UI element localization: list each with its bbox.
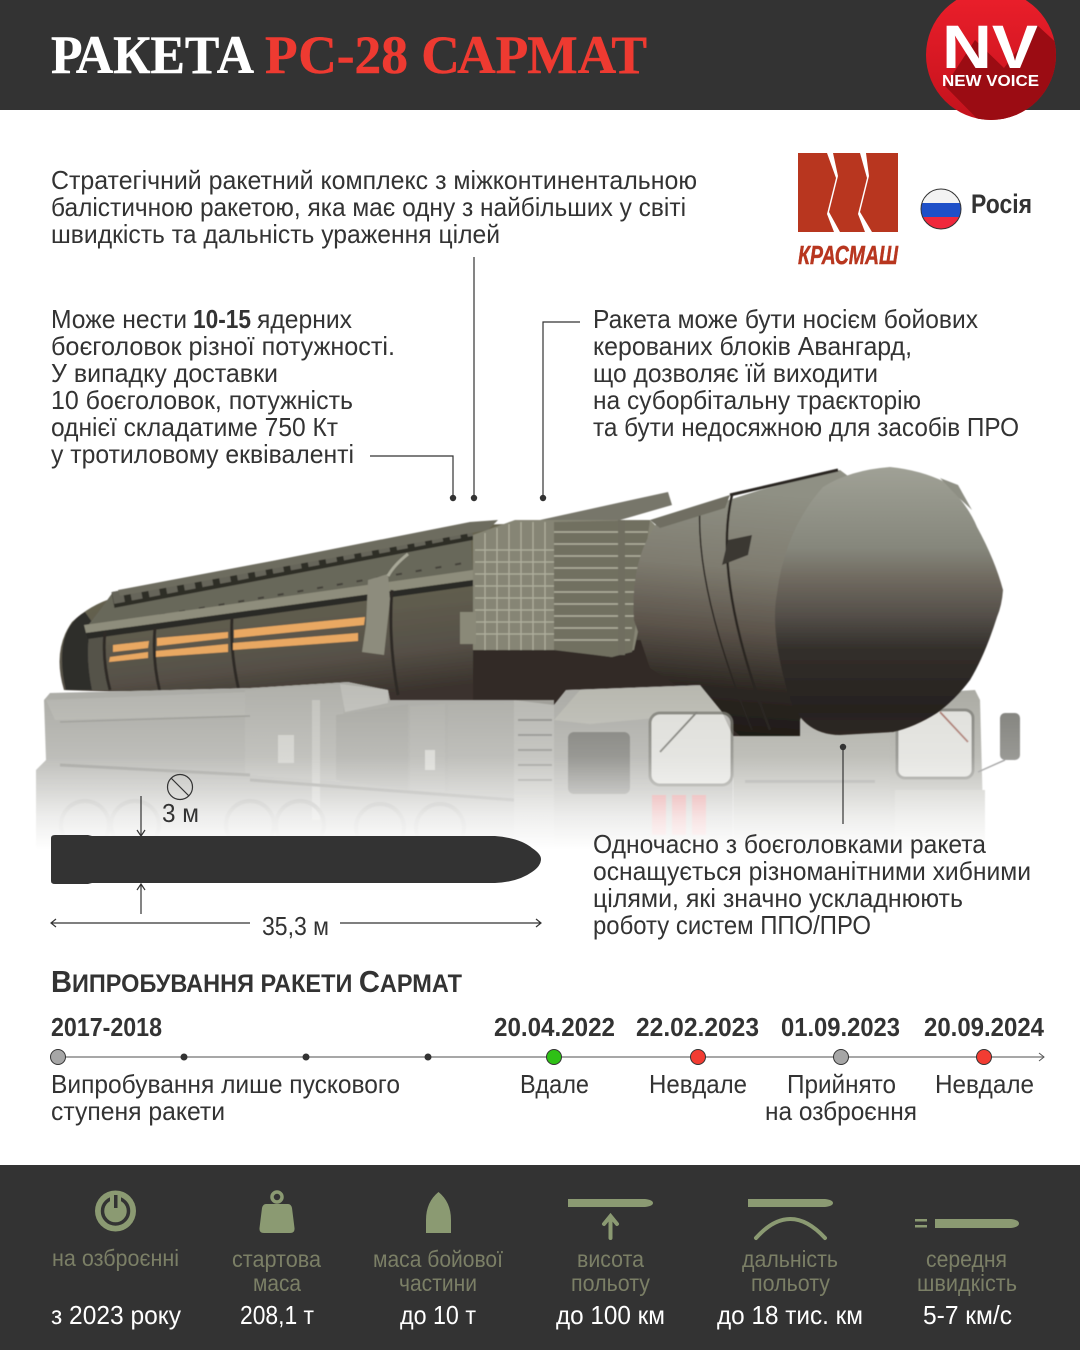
spec: average speed: швидкість <box>917 1270 1017 1296</box>
spec: average speed: 5-7 км/с <box>923 1300 1012 1330</box>
timeline dates: 20.04.2022 <box>494 1012 615 1042</box>
text block: warheads <box>51 304 395 469</box>
timeline descriptions: Невдале <box>935 1069 1034 1099</box>
rear body of the missile <box>60 520 740 736</box>
icon: rocket and arc <box>748 1199 833 1238</box>
text block: decoys: роботу систем ППО/ПРО <box>593 910 871 940</box>
spec: warhead mass: до 10 т <box>400 1300 476 1330</box>
icon: warhead <box>426 1192 451 1233</box>
tube <box>84 570 473 633</box>
timeline dates: 20.09.2024 <box>924 1012 1044 1042</box>
timeline dates: 2017-2018 <box>51 1012 162 1042</box>
spec: flight range <box>717 1199 863 1330</box>
missile <box>60 467 1003 736</box>
text block: Avangard: що дозволяє їй виходити <box>593 358 878 388</box>
spec: warhead mass <box>373 1192 504 1330</box>
spec: warhead mass: частини <box>399 1270 477 1296</box>
title: РАКЕТА <box>51 25 254 85</box>
spec: flight range: до 18 тис. км <box>717 1300 863 1330</box>
timeline dates <box>51 1012 1044 1042</box>
logo: Krasmash: КРАСМАШ <box>798 240 898 270</box>
truck front layer (launcher bed and cab) <box>36 682 733 852</box>
spec: in service: з 2023 року <box>51 1300 181 1330</box>
truck rear layer (behind the missile nose) <box>733 690 1020 850</box>
spec: launch mass: 208,1 т <box>240 1300 314 1330</box>
timeline descriptions: Невдале <box>649 1069 747 1099</box>
nose cone <box>775 467 1003 735</box>
timeline descriptions: ступеня ракети <box>51 1096 225 1126</box>
spec: launch mass <box>232 1192 321 1330</box>
text block: decoys: Одночасно з боєголовками ракета <box>593 829 986 859</box>
timeline descriptions <box>51 1069 1034 1126</box>
country: Russia flag and name: Росія <box>971 189 1032 219</box>
mid cylinder <box>633 470 880 736</box>
length arrow <box>51 919 541 927</box>
missile dimensions diagram <box>51 774 541 941</box>
rocket silhouette <box>51 835 541 884</box>
logo: NV New Voice <box>926 0 1056 120</box>
spec: average speed <box>915 1219 1019 1330</box>
logo: NV New Voice: NV <box>942 13 1038 81</box>
intro text: швидкість та дальність ураження цілей <box>51 219 500 249</box>
orange stripes <box>109 617 365 662</box>
timeline dates: 22.02.2023 <box>636 1012 759 1042</box>
text block: Avangard: Ракета може бути носієм бойових <box>593 304 978 334</box>
timeline descriptions: Випробування лише пускового <box>51 1069 400 1099</box>
text block: decoys: цілями, які значно ускладнюють <box>593 883 963 913</box>
text block: warheads: 10 боєголовок, потужність <box>51 385 353 415</box>
leader lines with dots <box>370 257 846 824</box>
icon: rocket and up arrow <box>568 1199 653 1238</box>
spec: in service <box>51 1190 181 1330</box>
text block: Avangard: на суборбітальну траєкторію <box>593 385 921 415</box>
icon: fast rocket <box>915 1219 1019 1228</box>
text block: warheads: Може нести <box>51 304 187 334</box>
text block: warheads: 10-15 <box>193 304 251 334</box>
timeline dates: 01.09.2023 <box>781 1012 900 1042</box>
logo: NV New Voice: NEW VOICE <box>942 73 1039 90</box>
spec: flight altitude: висота <box>577 1246 644 1272</box>
spec: warhead mass: маса бойової <box>373 1246 504 1272</box>
text block: decoys: оснащується різноманітними хибними <box>593 856 1031 886</box>
intro text <box>51 165 697 249</box>
text block: Avangard <box>593 304 1019 442</box>
spec: launch mass: стартова <box>232 1246 321 1272</box>
spec: launch mass: маса <box>253 1270 301 1296</box>
title: РС-28 САРМАТ <box>265 25 647 85</box>
spec: in service: на озброєнні <box>52 1245 179 1271</box>
diameter arrows <box>137 796 145 914</box>
timeline markers <box>50 1050 992 1064</box>
spec: flight range: дальність <box>742 1246 838 1272</box>
intro text: Стратегічний ракетний комплекс з міжконтинентальною <box>51 165 697 195</box>
header band <box>0 0 1080 110</box>
logo: Krasmash <box>798 153 898 270</box>
timeline descriptions: на озброєння <box>765 1096 917 1126</box>
spec: average speed: середня <box>926 1246 1007 1272</box>
lattice box <box>473 520 660 657</box>
timeline axis <box>58 1056 1044 1058</box>
diameter icon <box>168 774 192 800</box>
footer panel: key specs <box>0 1165 1080 1350</box>
text block: Avangard: та бути недосяжною для засобів ПРО <box>593 412 1019 442</box>
title <box>51 25 647 85</box>
spec: flight altitude: до 100 км <box>556 1300 665 1330</box>
timeline <box>50 1012 1044 1126</box>
text block: warheads: однієї складатиме 750 Кт <box>51 412 338 442</box>
timeline descriptions: Вдале <box>520 1069 589 1099</box>
text block: warheads: У випадку доставки <box>51 358 278 388</box>
text block: warheads: у тротиловому еквіваленті <box>51 439 354 469</box>
diameter label: 3 м <box>162 798 199 828</box>
spec: flight range: польоту <box>751 1270 830 1296</box>
fin and ribs <box>362 574 390 655</box>
spec: flight altitude: польоту <box>571 1270 650 1296</box>
intro text: балістичною ракетою, яка має одну з найбільших у світі <box>51 192 686 222</box>
text block: warheads: боєголовок різної потужності. <box>51 331 395 361</box>
text block: decoys <box>593 829 1031 940</box>
icon: weight <box>259 1192 295 1233</box>
upper band with rail <box>86 523 473 628</box>
length label: 35,3 м <box>262 911 329 941</box>
timeline descriptions: Прийнято <box>787 1069 896 1099</box>
heading: tests: ВИПРОБУВАННЯ РАКЕТИ САРМАТ <box>51 964 462 999</box>
country: Russia flag and name <box>921 189 1032 230</box>
icon: power <box>95 1190 136 1232</box>
spec: flight altitude <box>556 1199 665 1330</box>
text block: Avangard: керованих блоків Авангард, <box>593 331 912 361</box>
text block: warheads: ядерних <box>257 304 352 334</box>
